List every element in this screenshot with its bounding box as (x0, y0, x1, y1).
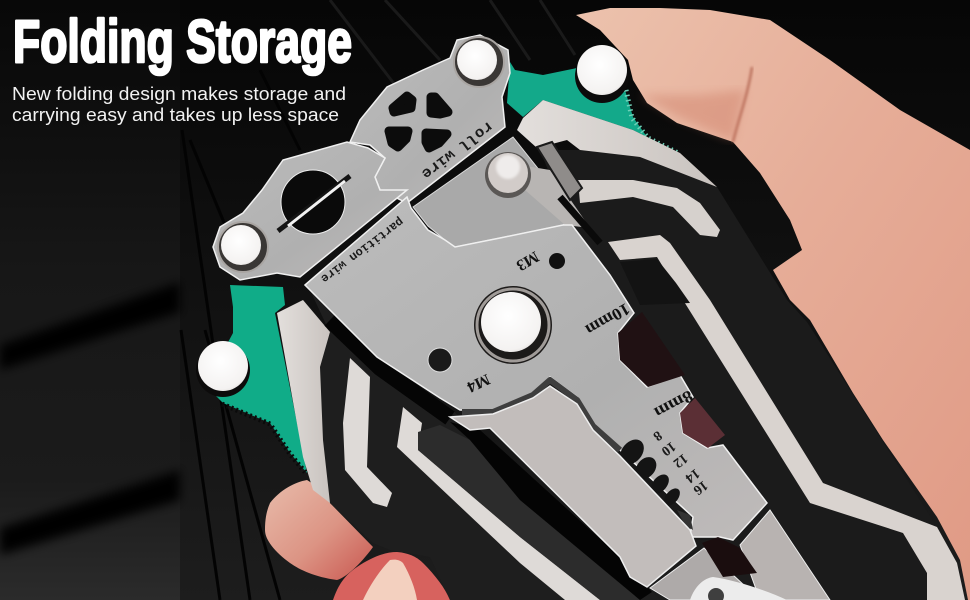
green gear: lower left (205, 285, 307, 473)
gauge numbers (650, 427, 710, 497)
left handle (277, 290, 660, 600)
gauge numbers: 12 (670, 450, 690, 470)
label: 10mm: 10mm (582, 299, 633, 340)
pliers: roll wire plate (350, 35, 510, 203)
label: roll wire: roll wire (418, 117, 496, 182)
description text (12, 84, 346, 125)
clover holes (389, 96, 448, 148)
gauge numbers: 16 (690, 477, 710, 497)
label: M3: M3 (513, 248, 542, 274)
pliers: lower jaw (450, 386, 830, 600)
handle inner black shape (620, 259, 690, 305)
rivet: left plate (218, 222, 268, 272)
label: partition wire: partition wire (318, 214, 406, 286)
plate shadow (330, 320, 450, 418)
finger with nail (333, 552, 450, 600)
rivet: centre pivot (474, 286, 552, 364)
title: Folding Storage (13, 8, 352, 75)
handle stripe: short (343, 358, 392, 507)
gauge numbers: 10 (658, 438, 678, 458)
round hole with slash (278, 170, 350, 234)
handle stripe: long (608, 235, 965, 600)
nose pin (690, 577, 787, 600)
handle cap: white top (517, 100, 717, 187)
stripping notches (615, 435, 693, 530)
pliers: partition wire plate (213, 142, 407, 280)
description text: New folding design makes storage and (12, 84, 346, 104)
knob: lower left (196, 341, 250, 397)
label: 8mm: 8mm (651, 386, 696, 422)
label: M4: M4 (464, 370, 492, 395)
right handle (517, 100, 965, 600)
handle stripe: upper (578, 180, 720, 237)
description text: carrying easy and takes up less space (12, 105, 339, 125)
green gear: upper right (507, 62, 680, 154)
knuckle crease (733, 67, 752, 142)
handle cap: white lower (277, 300, 330, 503)
rivet: small dome (485, 152, 531, 198)
knob: upper right (575, 45, 629, 103)
pliers: rear steel plate and pin (413, 137, 600, 247)
pocket under blade (418, 425, 640, 600)
cutter edge (462, 380, 620, 450)
pliers: main upper jaw (305, 197, 767, 540)
rivet: top plate (454, 37, 504, 87)
handle stripe: long lower (397, 407, 600, 600)
wrench notches (618, 312, 685, 387)
small holes and engraved labels (318, 117, 710, 497)
gauge numbers: 8 (650, 427, 664, 443)
thumb fingertip (265, 480, 373, 580)
hand (265, 8, 970, 600)
gauge numbers: 14 (682, 465, 702, 485)
